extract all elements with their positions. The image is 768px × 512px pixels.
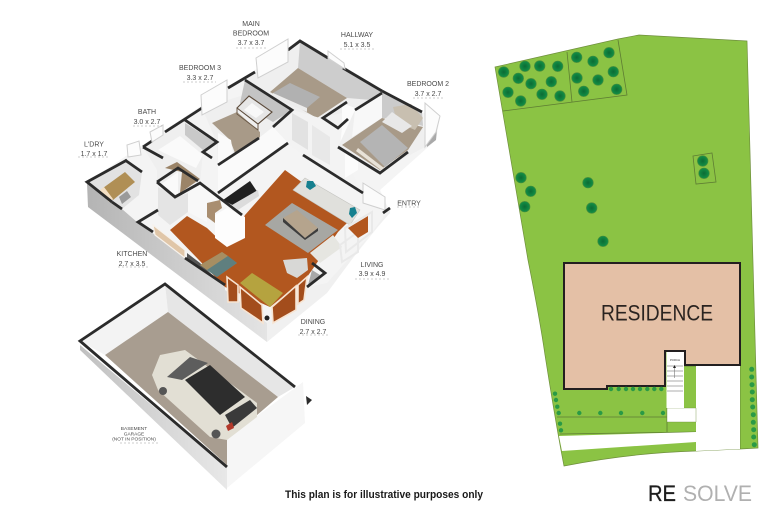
garage wall tops (80, 284, 295, 467)
label: laundry: L'DRY (84, 142, 104, 148)
dining window frames (227, 277, 307, 323)
exterior wall: left side (87, 183, 267, 342)
label: bedroom 2: BEDROOM 2 (407, 81, 449, 88)
logo (648, 481, 752, 506)
room: bathroom (143, 120, 217, 197)
porch and stairs (665, 351, 685, 408)
windows (127, 39, 440, 157)
room labels (78, 21, 449, 443)
entry door (363, 183, 385, 210)
room: bedroom 2 (338, 93, 438, 172)
hall wall (218, 127, 288, 193)
label: main bedroom: MAIN (242, 21, 260, 28)
lot (495, 35, 758, 466)
dining table (240, 273, 283, 307)
shrubs (553, 367, 757, 447)
building base (87, 40, 440, 342)
path (667, 408, 696, 422)
armchair (283, 258, 308, 278)
wood seen through door (348, 216, 368, 238)
residence title: RESIDENCE (601, 300, 713, 326)
garage right back wall (165, 284, 295, 397)
label: basement garage: (NOT IN POSITION) (112, 436, 156, 442)
label: bath: 3.0 x 2.7 (134, 119, 161, 126)
label: bedroom 3: 3.3 x 2.7 (187, 75, 214, 82)
label: laundry: 1.7 x 1.7 (81, 151, 108, 158)
label: hallway: 5.1 x 3.5 (344, 42, 371, 49)
room: laundry (87, 160, 142, 209)
piano (223, 181, 259, 210)
lower drive (559, 432, 696, 451)
black wall tops (87, 41, 422, 287)
label underlines (78, 48, 443, 443)
coffee table (283, 210, 318, 240)
kitchen window (153, 225, 185, 258)
garage left back wall (80, 284, 168, 355)
3D floor plan (87, 39, 440, 342)
room: main bedroom (245, 41, 382, 130)
garage (80, 284, 312, 490)
label: main bedroom: 3.7 x 3.7 (238, 40, 265, 47)
label: main bedroom: BEDROOM (233, 30, 269, 38)
kitchen island (200, 252, 237, 277)
label: bedroom 3: BEDROOM 3 (179, 65, 221, 72)
corner floor patch (308, 270, 320, 285)
kitchen counter (187, 253, 225, 285)
logo: RE (648, 481, 676, 506)
closets and hallway (273, 103, 363, 193)
logo: SOLVE (683, 481, 752, 506)
label: entry: ENTRY (397, 200, 421, 208)
living wood floor (170, 170, 347, 307)
label: living: LIVING (361, 262, 383, 269)
label: bath: BATH (138, 109, 156, 116)
porch and stairs: PORCH (670, 358, 680, 362)
garage front wall (227, 382, 305, 488)
second sofa (310, 235, 342, 263)
living door frames (340, 212, 372, 262)
rug (265, 203, 338, 253)
label: dining: 2.7 x 2.7 (300, 329, 327, 336)
room: bedroom 3 (202, 80, 292, 165)
trees (498, 47, 709, 247)
wall end marker (306, 396, 312, 405)
label: bedroom 2: 3.7 x 2.7 (415, 91, 442, 98)
bed (356, 104, 423, 170)
garage exterior wall (80, 345, 227, 490)
label: hallway: HALLWAY (341, 32, 373, 39)
sofa (293, 178, 360, 225)
label: kitchen: 2.7 x 3.5 (119, 261, 146, 268)
car (152, 350, 257, 440)
garage floor (105, 312, 278, 465)
label: basement garage: BASEMENT (121, 426, 147, 432)
dining corner post (264, 316, 270, 320)
wall and cabinet (158, 183, 245, 247)
residence (564, 263, 740, 389)
crib (237, 96, 272, 130)
disclaimer: This plan is for illustrative purposes only (285, 489, 483, 501)
exterior wall: right side (267, 208, 390, 342)
driveway (696, 365, 740, 451)
label: kitchen: KITCHEN (117, 251, 147, 258)
label: basement garage: GARAGE (124, 432, 144, 438)
label: dining: DINING (301, 319, 325, 326)
label: living: 3.9 x 4.9 (359, 271, 386, 278)
site plan (495, 35, 758, 466)
bed (272, 83, 320, 112)
plot lines (503, 40, 740, 449)
